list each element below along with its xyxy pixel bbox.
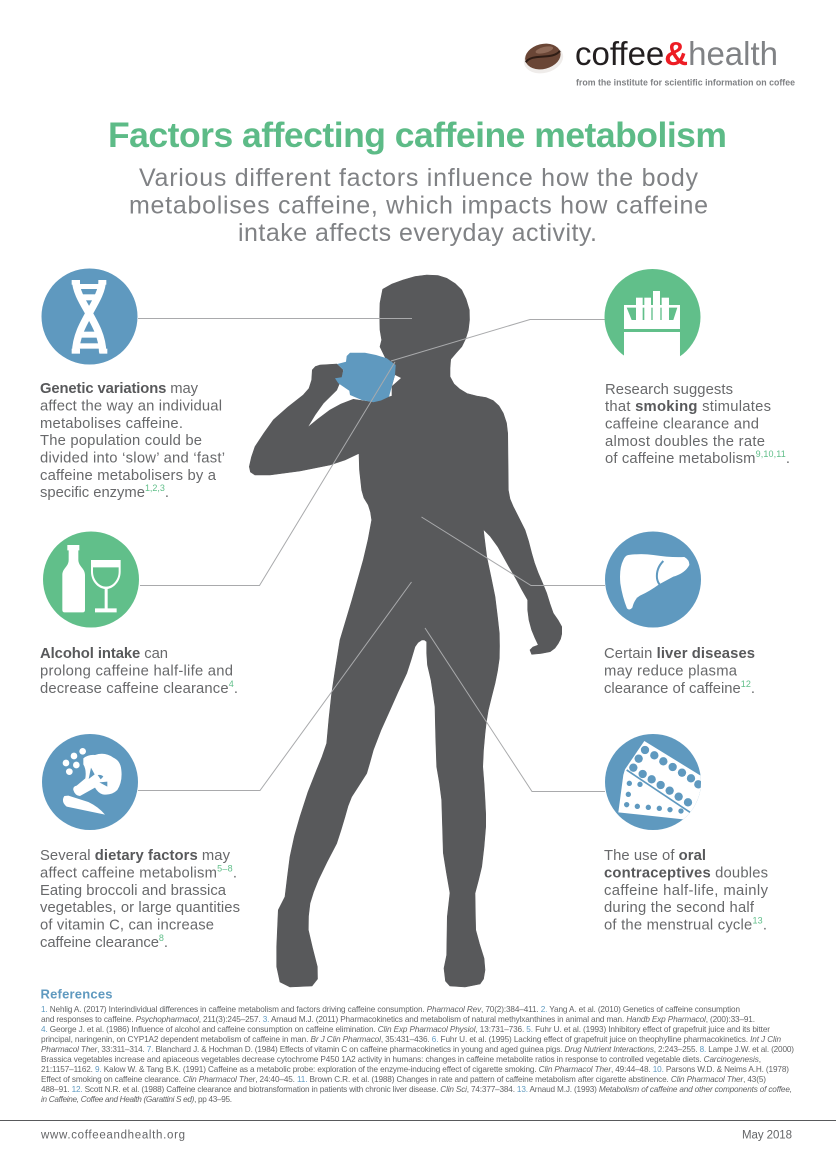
icon: coffee bean [520, 40, 566, 77]
title: Factors affecting caffeine metabolism [108, 115, 727, 155]
icon: bottle and wine glass [43, 532, 139, 628]
text: liver diseases [604, 646, 755, 697]
text: dietary factors: of vitamin C, can increase [40, 918, 214, 934]
panel: oral contraceptives [604, 734, 769, 934]
icon: DNA helix [42, 268, 138, 364]
text: genetic variations: specific enzyme [40, 485, 145, 501]
text: oral contraceptives: during the second half [604, 900, 755, 916]
references list: 488–91. 12. Scott N.R. et al. (1988) Caffeine clearance and biotransformation in patients with chronic liver disease. Clin Sci, 74:377–384. 13. Arnaud M.J. (1993) Metabolism of caffeine and other components of coffee, [41, 1085, 792, 1094]
references list: 21:1157–1162. 9. Kalow W. & Tang B.K. (1991) Caffeine as a metabolic probe: exploration of the enzyme-inducing effect of cigarette smoking. Clin Pharmacol Ther, 49:44–48. 10. Parsons W.D. & Neims A.H. (1978) [41, 1065, 789, 1074]
text: genetic variations: affect the way an individual [40, 398, 222, 414]
text: dietary factors: 8 [159, 933, 164, 943]
panel: alcohol intake [40, 532, 238, 697]
human silhouette [249, 275, 562, 987]
text: smoking: Research suggests [605, 382, 733, 398]
text: dietary factors: Eating broccoli and brassica [40, 883, 227, 899]
references list: in Caffeine, Coffee and Health (Garattini S ed), pp 43–95. [41, 1095, 232, 1104]
text: dietary factors: Several dietary factors may [40, 848, 231, 864]
text: dietary factors: vegetables, or large quantities [40, 900, 240, 916]
text: liver diseases: may reduce plasma [604, 664, 738, 680]
subtitle: Various different factors influence how the body [139, 164, 698, 192]
text: genetic variations: caffeine metabolisers by a [40, 468, 217, 484]
panel: smoking [604, 269, 790, 467]
text: smoking: that smoking stimulates [605, 399, 771, 415]
icon: contraceptive pill packs [605, 734, 705, 830]
leader lines [138, 318, 605, 792]
text: dietary factors: caffeine clearance [40, 935, 159, 951]
text: dietary factors [40, 848, 240, 951]
text: liver diseases: 12 [741, 679, 751, 689]
footer website: www.coffeeandhealth.org [40, 1130, 185, 1142]
subtitle: metabolises caffeine, which impacts how caffeine [129, 192, 708, 220]
text: liver diseases: Certain liver diseases [604, 646, 755, 662]
text: oral contraceptives: The use of oral [604, 848, 706, 864]
text: oral contraceptives: of the menstrual cycle [604, 918, 752, 934]
text: oral contraceptives: caffeine half-life, mainly [604, 883, 769, 899]
text: liver diseases: clearance of caffeine [604, 681, 741, 697]
text: genetic variations: metabolises caffeine. [40, 416, 183, 432]
references list: Effect of smoking on caffeine clearance. Clin Pharmacol Ther, 24:40–45. 11. Brown C.R. et al. (1988) Changes in rate and pattern of caffeine metabolism after cigarette abstinence. Clin Pharmacol Ther, 43(5) [41, 1075, 766, 1084]
references list: 4. George J. et al. (1986) Influence of alcohol and caffeine consumption on caffeine elimination. Clin Exp Pharmacol Physiol, 13:731–736. 5. Fuhr U. et al. (1993) Inhibitory effect of grapefruit juice and its bitter [41, 1025, 770, 1034]
text: alcohol intake: 4 [229, 679, 234, 689]
neck gap [392, 375, 401, 386]
subtitle: intake affects everyday activity. [238, 219, 597, 247]
text: genetic variations: . [165, 485, 169, 501]
panel: liver diseases [604, 532, 755, 697]
references list: Pharmacol Ther, 33:311–314. 7. Blanchard J. & Hochman D. (1984) Effects of vitamin C on caffeine pharmacokinetics in young and aged guinea pigs. Drug Nutrient Interactions, 2:243–255. 8. Lampe J.W. et al. (2000) [41, 1045, 794, 1054]
panel: genetic variations [40, 268, 225, 501]
logo tagline: from the institute for scientific information on coffee [576, 78, 795, 88]
references list: principal, naringenin, on CYP1A2 dependent metabolism of caffeine in man. Br J Clin Pharmacol, 35:431–436. 6. Fuhr U. et al. (1995) Lacking effect of grapefruit juice on theophylline pharmacokinetics. Int J Clin [41, 1035, 781, 1044]
text: smoking: caffeine clearance and [605, 416, 759, 432]
text: genetic variations: The population could be [40, 433, 202, 449]
text: dietary factors: affect caffeine metabolism [40, 866, 217, 882]
text: smoking: of caffeine metabolism [605, 451, 755, 467]
text: genetic variations [40, 381, 225, 501]
text: smoking: 9,10,11 [756, 449, 786, 459]
text: genetic variations: Genetic variations may [40, 381, 199, 397]
footer date: May 2018 [742, 1130, 792, 1142]
references list: and responses to caffeine. Psychopharmacol, 211(3):245–257. 3. Arnaud M.J. (2011) Pharmacokinetics and metabolism of natural methylxanthines in animal and man. Handb Exp Pharmacol, (200):33–91. [41, 1015, 755, 1024]
panel: dietary factors [40, 734, 240, 951]
text: smoking: . [786, 451, 790, 467]
cup [335, 353, 396, 402]
references heading: References [40, 986, 112, 1002]
text: dietary factors: 5–8 [217, 864, 233, 874]
logo wordmark: coffee&health [575, 35, 778, 72]
icon: broccoli and carrot [42, 734, 138, 830]
text: genetic variations: 1,2,3 [145, 483, 165, 493]
text: alcohol intake [40, 646, 238, 697]
text: oral contraceptives [604, 848, 769, 934]
text: oral contraceptives: contraceptives doubles [604, 866, 768, 882]
icon: liver [605, 532, 701, 628]
references list [41, 1005, 794, 1104]
icon: cigarette pack [604, 269, 700, 365]
subtitle [129, 164, 708, 247]
text: alcohol intake: . [234, 681, 238, 697]
text: dietary factors: . [233, 866, 237, 882]
text: alcohol intake: prolong caffeine half-life and [40, 664, 233, 680]
text: dietary factors: . [164, 935, 168, 951]
text: oral contraceptives: . [763, 918, 767, 934]
text: oral contraceptives: 13 [752, 916, 763, 926]
text: alcohol intake: Alcohol intake can [40, 646, 168, 662]
text: smoking [605, 382, 790, 467]
logo: coffee and health [520, 35, 795, 88]
text: alcohol intake: decrease caffeine clearance [40, 681, 229, 697]
text: smoking: almost doubles the rate [605, 434, 765, 450]
text: liver diseases: . [751, 681, 755, 697]
references list: Brassica vegetables increase and apiaceous vegetables decrease cytochrome P450 1A2 activity in humans: changes in caffeine metabolite ratios in response to controlled vegetable diets. Carcinogenesis, [41, 1055, 761, 1064]
references list: 1. Nehlig A. (2017) Interindividual differences in caffeine metabolism and factors driving caffeine consumption. Pharmacol Rev, 70(2):384–411. 2. Yang A. et al. (2010) Genetics of caffeine consumption [41, 1005, 740, 1014]
text: genetic variations: divided into ‘slow’ and ‘fast’ [40, 450, 225, 466]
